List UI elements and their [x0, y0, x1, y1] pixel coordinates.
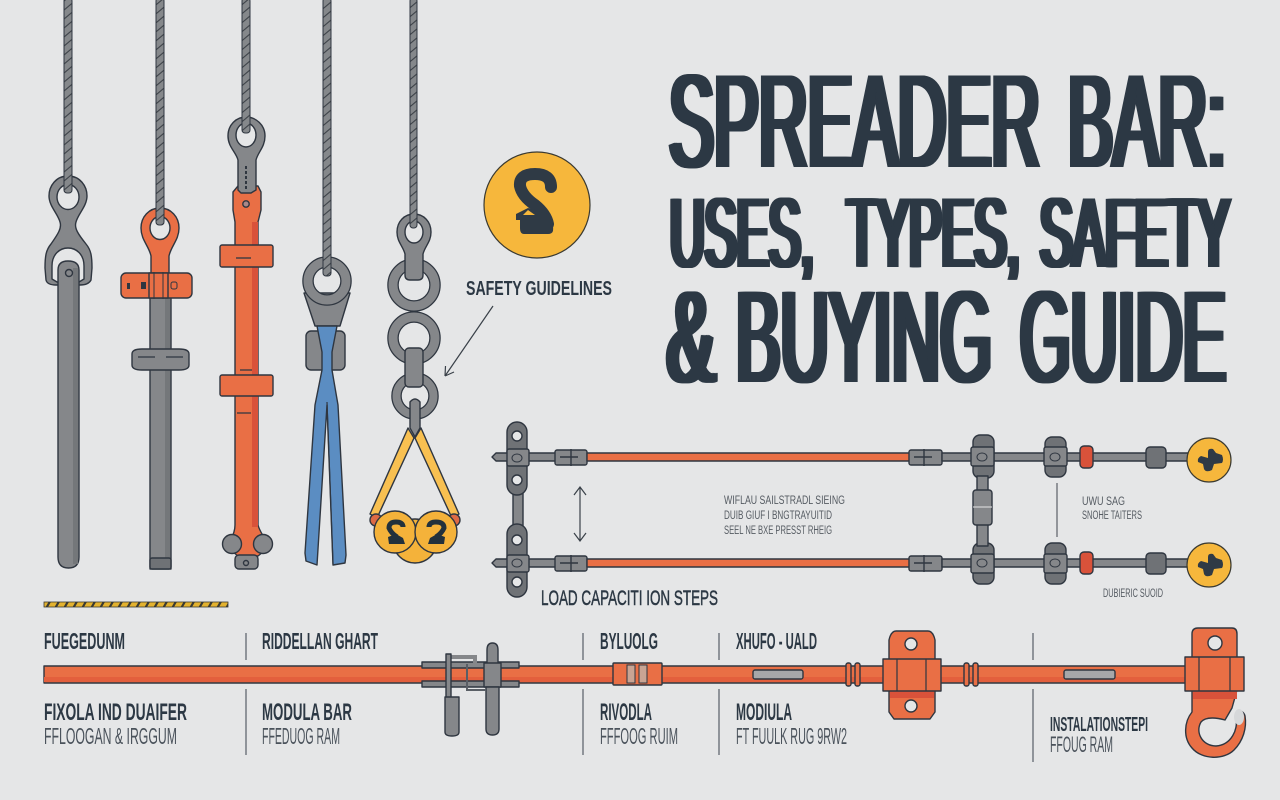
hazard strip: [44, 602, 228, 607]
caption: lower rail note: DUBIERIC SUOID: [1103, 588, 1163, 600]
text block: span notes: UWU SAG: [1082, 496, 1125, 508]
lower labels: bottom row: [44, 699, 1148, 736]
sub labels: bottom row: FFFOOG RUIM: [600, 723, 678, 749]
fitting: collar rings right: [964, 663, 978, 686]
fitting: orange mounting clamp: [883, 631, 941, 719]
bottom rail: [492, 543, 1188, 584]
heading: load capacity steps: LOAD CAPACITI ION STEPS: [541, 587, 718, 610]
icon: bottom rail badge: [1187, 543, 1231, 587]
fitting: central clamp: [422, 643, 519, 736]
top rail: [492, 435, 1188, 478]
vertical connector: [973, 476, 992, 546]
spreader bar 4: blue split strap on grey ring: [304, 0, 350, 565]
left end plates: [507, 422, 527, 597]
text block: rail notes: SEEL NE BXE PRESST RHEIG: [724, 525, 832, 537]
main title: USES,: [670, 177, 814, 288]
dividers: bottom row: [246, 633, 1033, 762]
arrow: rail spacing: [574, 487, 586, 541]
lower labels: bottom row: MODIULA: [736, 699, 792, 726]
top labels: bottom row: RIDDELLAN GHART: [262, 628, 378, 654]
infographic canvas: FFOUG RAM: [1050, 732, 1113, 757]
sub labels: bottom row: FFLOOGAN & IRGGUM: [44, 723, 177, 749]
lower labels: bottom row: MODULA BAR: [262, 699, 352, 726]
main bar: orange beam with fittings: [44, 628, 1246, 757]
sub labels: bottom row: FT FUULK RUG 9RW2: [736, 723, 847, 749]
spreader bar 3: orange body with grey eye and end knobs: [220, 0, 273, 569]
top labels: bottom row: BYLUOLG: [600, 628, 658, 654]
lower labels: bottom row: INSTALATIONSTEPI: [1050, 714, 1148, 736]
top labels: bottom row: [44, 628, 817, 654]
sub labels: bottom row: [44, 723, 1113, 757]
divider: rail span marker: [1056, 483, 1058, 537]
fitting: collar rings left: [846, 663, 860, 686]
fitting: band with tags: [613, 663, 662, 685]
text block: rail notes: WIFLAU SAILSTRADL SIEING: [724, 495, 845, 507]
lower labels: bottom row: FIXOLA IND DUAIFER: [44, 699, 187, 726]
infographic canvas: XHUFO - UALD: [736, 628, 817, 654]
main title: TYPES,: [847, 177, 1020, 288]
text block: rail notes: DUIB GIUF I BNGTRAYUITID: [724, 510, 832, 522]
diagram: twin rail load assembly: [492, 422, 1231, 597]
text block: span notes: [1082, 496, 1142, 522]
lower labels: bottom row: RIVODLA: [600, 699, 652, 726]
arrow: safety guidelines pointer: [445, 306, 493, 376]
sub labels: bottom row: FFEDUOG RAM: [262, 723, 340, 749]
icon: top rail badge: [1187, 438, 1231, 482]
safety guidelines label: SAFETY GUIDELINES: [466, 278, 612, 300]
main title: BUYING: [736, 263, 992, 410]
icon: end hook: [1185, 628, 1246, 757]
spreader bar 1: grey with figure-eight eye: [45, 0, 92, 568]
top labels: bottom row: FUEGEDUNM: [44, 628, 125, 654]
spreader bar 2: orange eye and crossbar, grey shaft: [121, 0, 192, 569]
text block: rail notes: [724, 495, 845, 537]
main title: [667, 48, 1230, 410]
fitting: grey tag one: [753, 670, 803, 679]
fitting: grey tag two: [1064, 670, 1115, 679]
icon: safety badge: [484, 152, 590, 258]
text block: span notes: SNOHE TAITERS: [1082, 510, 1142, 522]
spreader bar 5: chain links and yellow sling with two coins: [370, 0, 460, 563]
main title: &: [667, 263, 715, 410]
